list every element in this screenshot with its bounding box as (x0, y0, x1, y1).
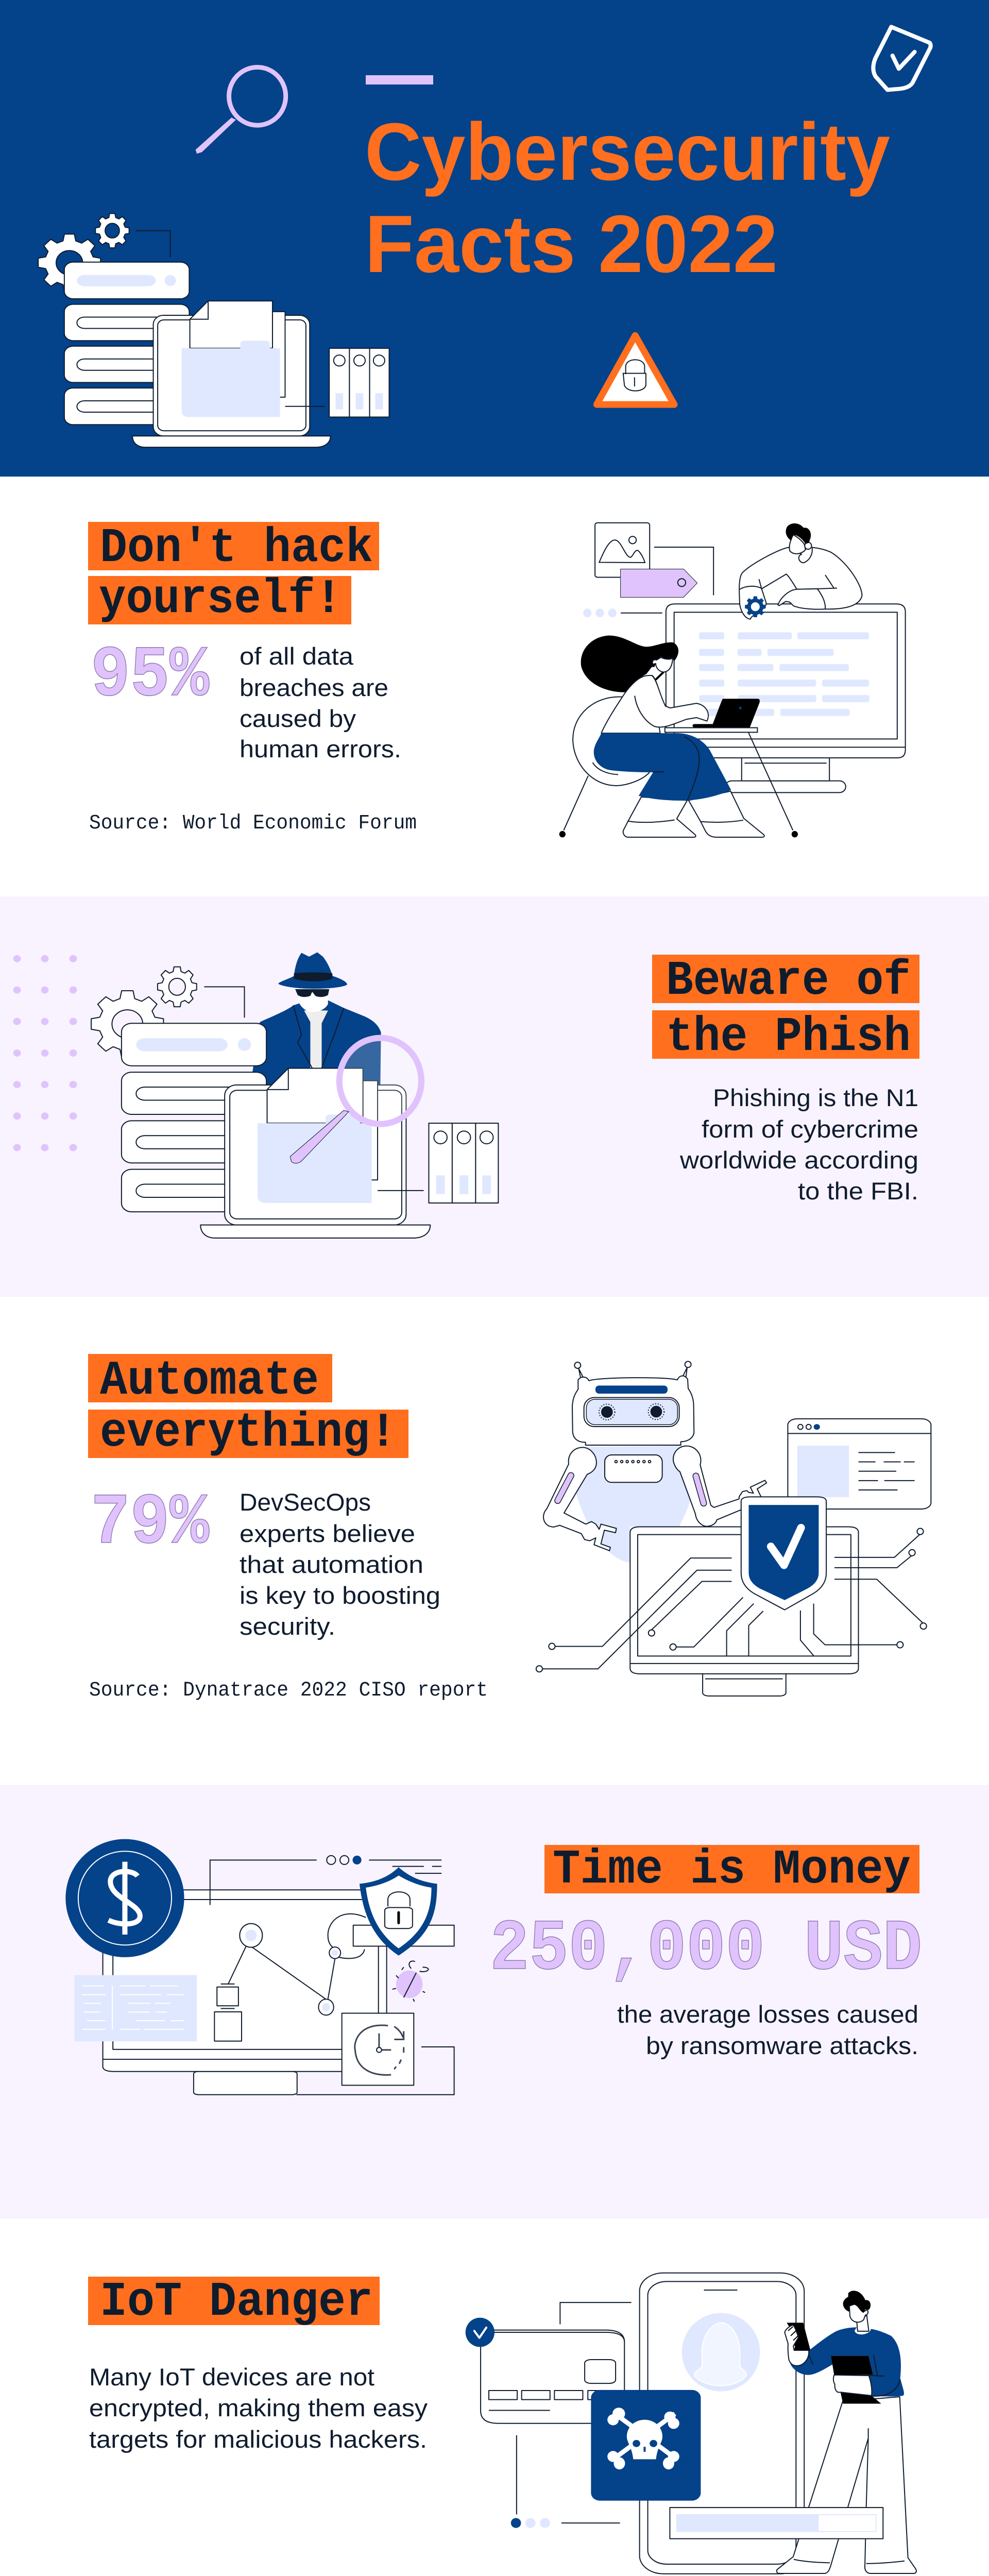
heading: time is money: Time is Money (553, 1843, 911, 1897)
text: average losses (617, 2001, 918, 2059)
illustration: hacker (252, 952, 381, 1086)
heading: automate everything: Automate (100, 1354, 319, 1409)
illustration: servers, laptop and folders (38, 213, 389, 447)
text: iot devices: targets for malicious hackers. (89, 2426, 427, 2453)
heading: beware of the phish (652, 954, 919, 1065)
progress bar (670, 2507, 883, 2539)
title: Cybersecurity (365, 107, 890, 197)
icon: warning triangle with lock (596, 335, 674, 404)
title: Facts 2022 (365, 199, 778, 290)
robot (543, 1361, 766, 1563)
dot grid (13, 955, 77, 1151)
text: devsecops: security. (240, 1613, 335, 1640)
text: phishing: to the FBI. (798, 1177, 918, 1205)
illustration: monitor with coin, shield and clock (65, 1839, 454, 2095)
text: devsecops: DevSecOps (240, 1488, 371, 1516)
text: phishing: worldwide according (679, 1146, 918, 1174)
source: Source: World Economic Forum (89, 812, 417, 835)
icon: shield with check (873, 27, 931, 90)
panel: iot danger (0, 2218, 989, 2576)
text: human errors (240, 642, 401, 762)
text: devsecops: experts believe (240, 1520, 415, 1547)
text: devsecops (240, 1488, 440, 1640)
source: Source: Dynatrace 2022 CISO report (89, 1679, 488, 1702)
illustration: servers, laptop and folders (91, 967, 498, 1238)
text: iot devices: Many IoT devices are not (89, 2363, 374, 2391)
illustration: robot and shield monitor (536, 1361, 931, 1696)
panel: time is money (0, 1785, 989, 2218)
stat: 95%: 95% (91, 635, 210, 717)
illustration: man and woman at monitor (559, 523, 906, 837)
person with phone and clipboard (777, 2291, 916, 2573)
text: iot devices: encrypted, making them easy (89, 2394, 428, 2421)
text: human errors: breaches are (240, 674, 388, 701)
illustration: phone, card, skull and person (466, 2273, 916, 2574)
heading: automate everything: everything! (100, 1406, 397, 1461)
heading: iot danger: IoT Danger (100, 2275, 373, 2330)
icon: magnifier (290, 1038, 421, 1163)
heading: don't hack yourself: Don't hack (100, 521, 373, 576)
title (365, 107, 890, 290)
heading: beware of the phish: the Phish (666, 1010, 911, 1065)
panel: don't hack yourself (0, 477, 989, 896)
text: average losses: by ransomware attacks. (646, 2032, 918, 2059)
text: phishing: form of cybercrime (702, 1115, 918, 1143)
stat: 250,000 USD: 250,000 USD (490, 1909, 922, 1991)
stat: 79%: 79% (91, 1483, 210, 1565)
accent bar (366, 75, 433, 84)
heading: don't hack yourself (88, 521, 379, 627)
text: human errors: of all data (240, 642, 354, 670)
heading: automate everything (88, 1354, 408, 1461)
icon: magnifier (196, 67, 286, 154)
monitor with shield and circuits (536, 1419, 931, 1696)
panel: automate everything (0, 1297, 989, 1785)
text: phishing (679, 1084, 918, 1205)
text: devsecops: that automation (240, 1551, 423, 1578)
text: average losses: the average losses caused (617, 2001, 918, 2028)
heading: beware of the phish: Beware of (666, 954, 911, 1009)
text: iot devices (89, 2363, 428, 2453)
panel: beware of the phish (0, 896, 989, 1297)
phone, card and skull (466, 2273, 804, 2574)
text: devsecops: is key to boosting (240, 1582, 440, 1609)
heading: don't hack yourself: yourself! (99, 572, 342, 627)
panel: header (0, 0, 989, 477)
text: human errors: human errors. (240, 735, 401, 762)
text: phishing: Phishing is the N1 (713, 1084, 918, 1111)
text: human errors: caused by (240, 705, 356, 732)
